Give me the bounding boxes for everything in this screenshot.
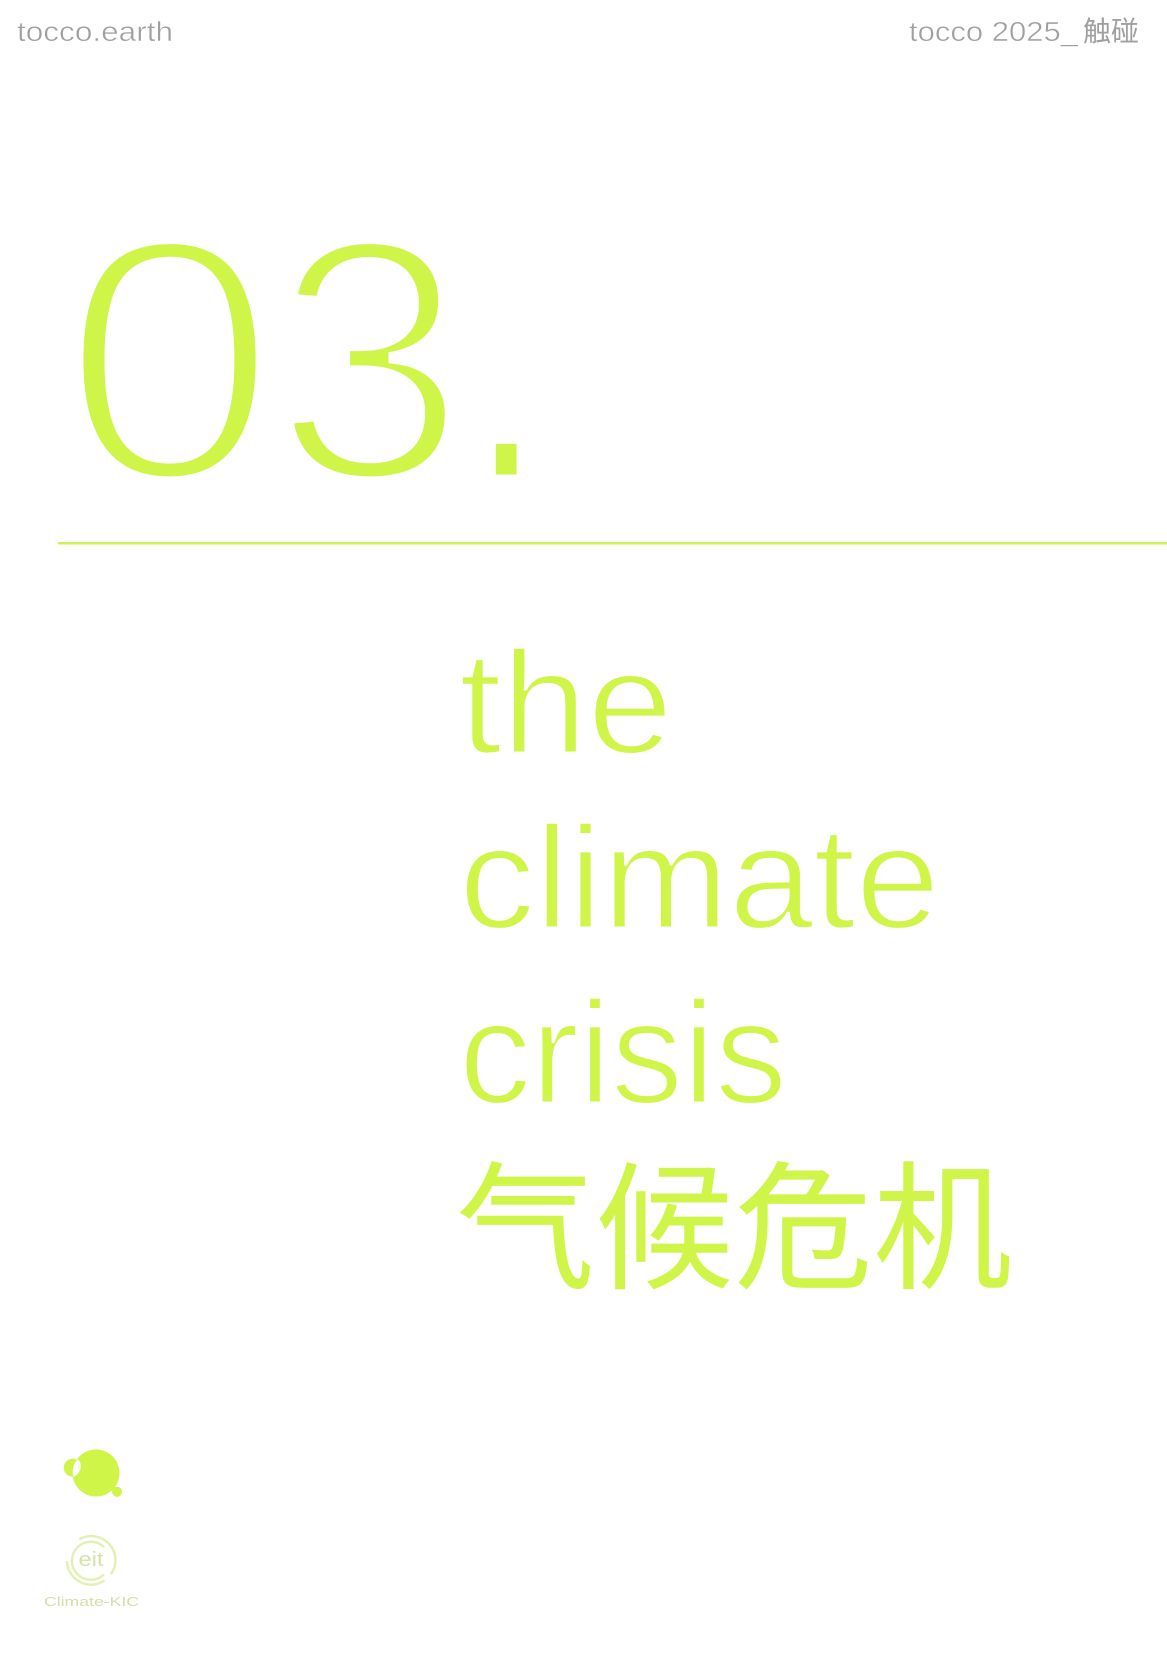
header right: document title bbox=[909, 10, 1139, 50]
divider rule bbox=[58, 542, 1167, 544]
EIT Climate-KIC logo bbox=[44, 1536, 139, 1609]
section title chinese: 气候危机 bbox=[456, 1118, 1012, 1319]
eit wordmark: eit bbox=[78, 1549, 104, 1571]
section title english bbox=[459, 621, 940, 1134]
header right: document title: 触碰 bbox=[1083, 10, 1139, 50]
section title english: the bbox=[459, 621, 673, 784]
section title english: climate bbox=[459, 796, 940, 959]
section title english: crisis bbox=[459, 971, 787, 1134]
Climate-KIC wordmark: Climate-KIC bbox=[44, 1595, 139, 1609]
section number bbox=[62, 166, 536, 553]
header left: website: tocco.earth bbox=[17, 16, 173, 47]
header right: document title: tocco 2025_ bbox=[909, 16, 1078, 47]
section number: . bbox=[476, 215, 536, 535]
section number: 3 bbox=[274, 168, 466, 553]
tocco logo bbox=[64, 1450, 122, 1497]
section number: 0 bbox=[62, 166, 278, 552]
